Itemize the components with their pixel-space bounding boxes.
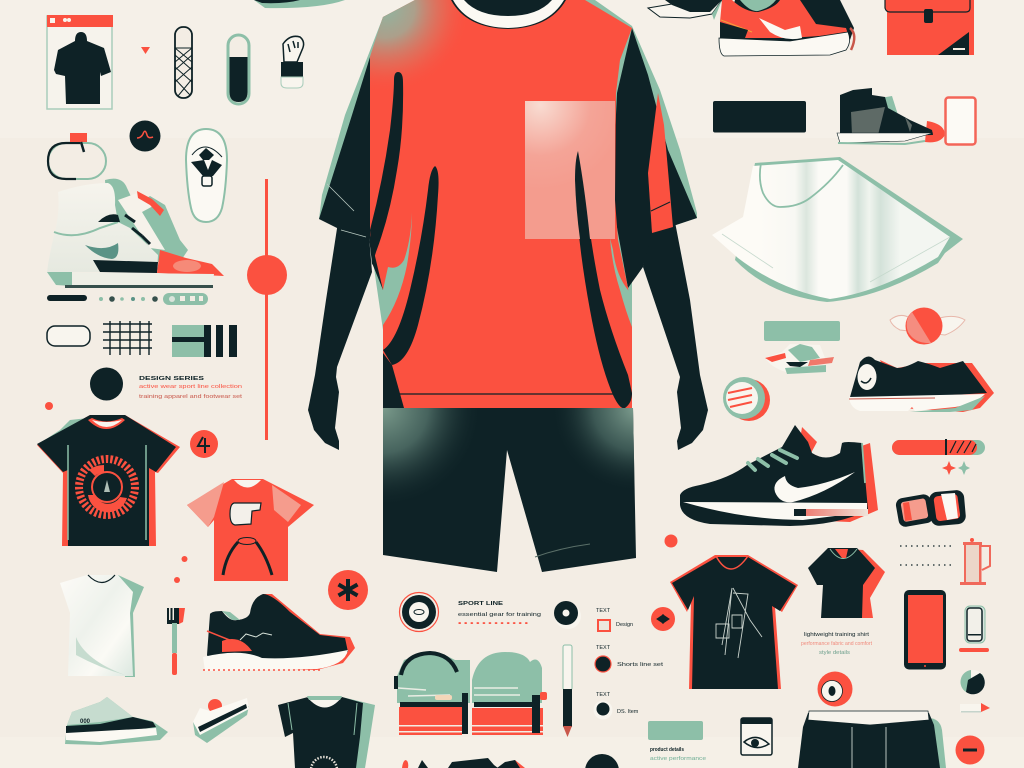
- sandal icon: [186, 129, 227, 222]
- big black sneaker: [680, 425, 878, 526]
- left sleeve: [319, 57, 383, 290]
- collar seam: [54, 222, 118, 235]
- eye target icon: [818, 672, 852, 706]
- laces: [118, 192, 165, 250]
- dark opening: [98, 214, 120, 222]
- pen icon: [563, 645, 572, 737]
- coral jug icon: [960, 538, 990, 585]
- text under small top: [801, 632, 872, 656]
- left bag: [397, 652, 470, 703]
- minus red circle: [956, 736, 984, 764]
- bag pair icon: [394, 652, 547, 735]
- goggles icon: [895, 489, 966, 528]
- red star circle: [328, 570, 368, 610]
- dotted lines: [900, 546, 952, 565]
- white upper: [47, 183, 158, 272]
- shirt outline in mint: [319, 0, 697, 330]
- small text block left: [139, 376, 243, 400]
- large high-top shoe: [47, 179, 224, 288]
- central figure: [308, 0, 708, 572]
- sleeve stitch lines: [327, 184, 366, 237]
- red circle with four: [190, 430, 218, 458]
- small sneaker bottom left: 000: [80, 719, 91, 725]
- black circle: [90, 368, 123, 400]
- bottom black dot: [585, 754, 619, 768]
- swoosh: [85, 243, 118, 259]
- shirt body: [370, 0, 632, 408]
- black running shoe: [203, 594, 355, 671]
- black printed tee: [37, 415, 180, 546]
- left arm: [308, 222, 372, 450]
- legend column: Design: [616, 622, 633, 628]
- hem line: [383, 393, 632, 395]
- black bar: [713, 101, 806, 132]
- vertical red line with dot: [247, 179, 287, 440]
- sparkles: [942, 461, 970, 475]
- shoe brush icon: [193, 698, 249, 743]
- sole: [47, 272, 214, 286]
- top sneaker: [719, 0, 854, 56]
- eye card icon: [741, 718, 772, 755]
- circle logo icon: [130, 120, 160, 152]
- red tee: [187, 479, 314, 581]
- legend column: DS. Item: [617, 709, 639, 715]
- black low shoe: [849, 356, 994, 412]
- collar: [451, 0, 566, 29]
- figure bottle icon: [281, 36, 304, 88]
- small device icon: [959, 606, 989, 652]
- fork brush icon: [167, 608, 185, 675]
- shirt mint accents: [383, 212, 412, 325]
- bottom shorts: [798, 711, 946, 768]
- shorts: [383, 408, 636, 572]
- legend column: TEXT: [596, 692, 611, 698]
- text under small top: style details: [819, 650, 850, 656]
- text block centre: [458, 601, 541, 627]
- phone dark with red screen: [904, 590, 946, 670]
- stripe block: [172, 325, 237, 357]
- small shoe icon under bar: [765, 344, 834, 374]
- mint bar with text: active performance: [650, 756, 706, 762]
- small text block left: training apparel and footwear set: [139, 394, 243, 400]
- mint bar with text: [648, 721, 706, 762]
- red dot: [45, 402, 53, 410]
- dark midfoot: [93, 260, 158, 273]
- right sleeve: [612, 28, 697, 288]
- fold over pocket: [575, 151, 590, 239]
- small dots: [174, 556, 188, 583]
- grid icon: [103, 321, 152, 355]
- bottom shoe strip: [402, 758, 525, 768]
- top cap icon: [648, 0, 722, 20]
- small sneaker bottom left: [65, 697, 168, 745]
- small pencil: [960, 703, 990, 712]
- legend column: TEXT: [596, 645, 611, 651]
- small text block left: active wear sport line collection: [139, 384, 242, 390]
- loop icon: [48, 133, 106, 179]
- capsule bottle icon: [228, 35, 249, 104]
- text under small top: performance fabric and comfort: [801, 641, 872, 647]
- row of tiny symbols: [47, 293, 208, 305]
- top-right bag: [885, 0, 974, 55]
- mint backing: [105, 179, 188, 262]
- small triangle: [141, 47, 150, 54]
- text block centre: SPORT LINE: [458, 601, 503, 607]
- target icon: [554, 601, 581, 629]
- text block centre: • • • • • • • • • • • •: [458, 621, 528, 627]
- card with hoodie: [47, 15, 113, 109]
- mint bar: [764, 321, 840, 341]
- legend column: Shorts line set: [617, 662, 664, 668]
- small text block left: DESIGN SERIES: [139, 376, 204, 382]
- right bag: [472, 652, 542, 703]
- right sleeve red strip: [648, 93, 673, 233]
- mint bar with text: product details: [650, 747, 684, 753]
- pill outline icon: [47, 326, 90, 346]
- white tee: [60, 575, 144, 677]
- phone outline: [946, 98, 976, 144]
- shirt fold strokes: [370, 72, 632, 408]
- legend column: [594, 608, 664, 720]
- toe: [157, 250, 224, 276]
- text under small top: lightweight training shirt: [804, 632, 870, 638]
- small dark top: [808, 548, 885, 618]
- right arm: [643, 222, 708, 450]
- red dot near tee: [664, 534, 678, 548]
- red star dot right of legend: [651, 607, 675, 631]
- red circle with ribbon: [890, 308, 965, 344]
- black tee with sketch: [670, 555, 798, 689]
- legend column: TEXT: [596, 608, 611, 614]
- text block centre: essential gear for training: [458, 612, 541, 618]
- capsule bar: [892, 439, 985, 455]
- ring logo icon: [400, 592, 438, 632]
- top strap piece: [254, 0, 345, 8]
- high-top dark shoe: [837, 88, 945, 144]
- half circle icon: [960, 670, 985, 694]
- tongue red: [137, 191, 164, 216]
- tape roll icon: [723, 377, 770, 421]
- chest pocket: [525, 101, 615, 239]
- bottom black tee: [278, 696, 375, 768]
- net bag icon: [175, 27, 192, 98]
- white cape garment: [712, 157, 963, 302]
